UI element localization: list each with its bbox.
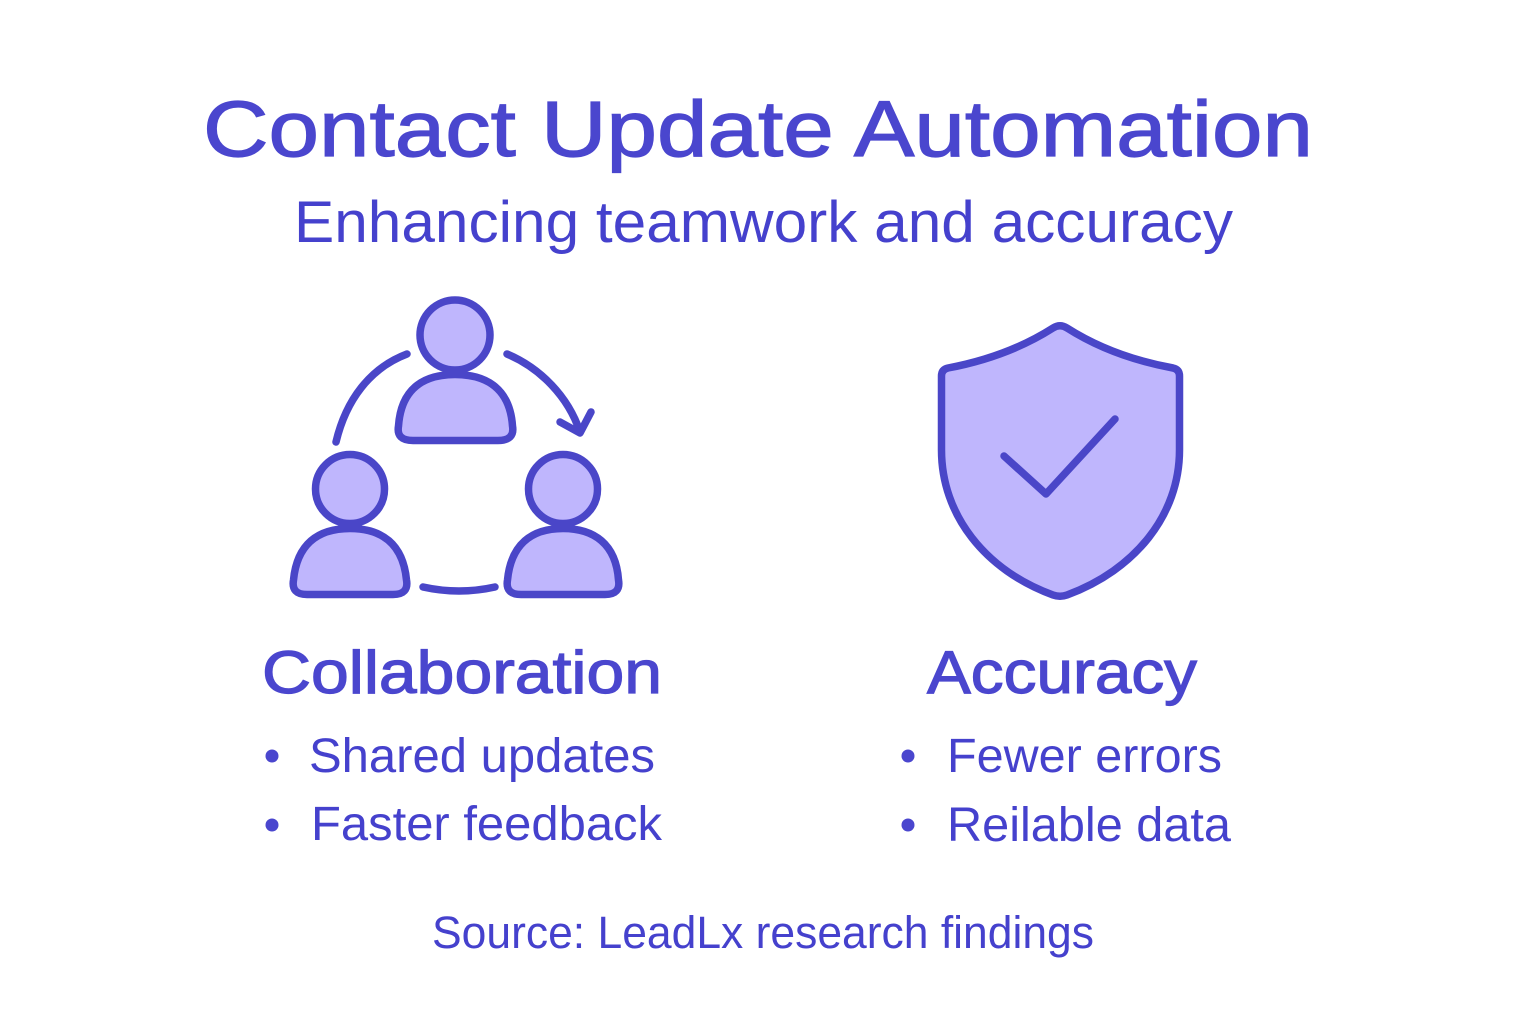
panel: collaboration bbox=[262, 639, 663, 851]
list item: reliable data: Reilable data bbox=[947, 799, 1231, 852]
list item: shared updates: Shared updates bbox=[309, 730, 655, 783]
subtitle: Enhancing teamwork and accuracy bbox=[294, 190, 1233, 255]
arrow: right arc with arrowhead bbox=[507, 354, 591, 433]
icon: right person bbox=[507, 454, 619, 594]
icon: shield with check bbox=[942, 326, 1180, 596]
heading: accuracy: Accuracy bbox=[927, 639, 1197, 706]
icon: collaboration team cycle bbox=[293, 300, 619, 594]
arrow: bottom arc bbox=[423, 587, 495, 591]
icon: left person bbox=[293, 454, 407, 594]
icon: check mark bbox=[1004, 419, 1115, 494]
list item: fewer errors: Fewer errors bbox=[947, 730, 1222, 783]
icon: top person bbox=[398, 300, 513, 440]
title: Contact Update Automation bbox=[203, 84, 1313, 173]
arrow: left arc bbox=[336, 354, 407, 442]
icon: shield bbox=[942, 326, 1180, 596]
list item: faster feedback: Faster feedback bbox=[311, 798, 663, 851]
source note: Source: LeadLx research findings bbox=[432, 907, 1094, 958]
panel: accuracy bbox=[902, 639, 1231, 852]
heading: collaboration: Collaboration bbox=[262, 639, 662, 706]
